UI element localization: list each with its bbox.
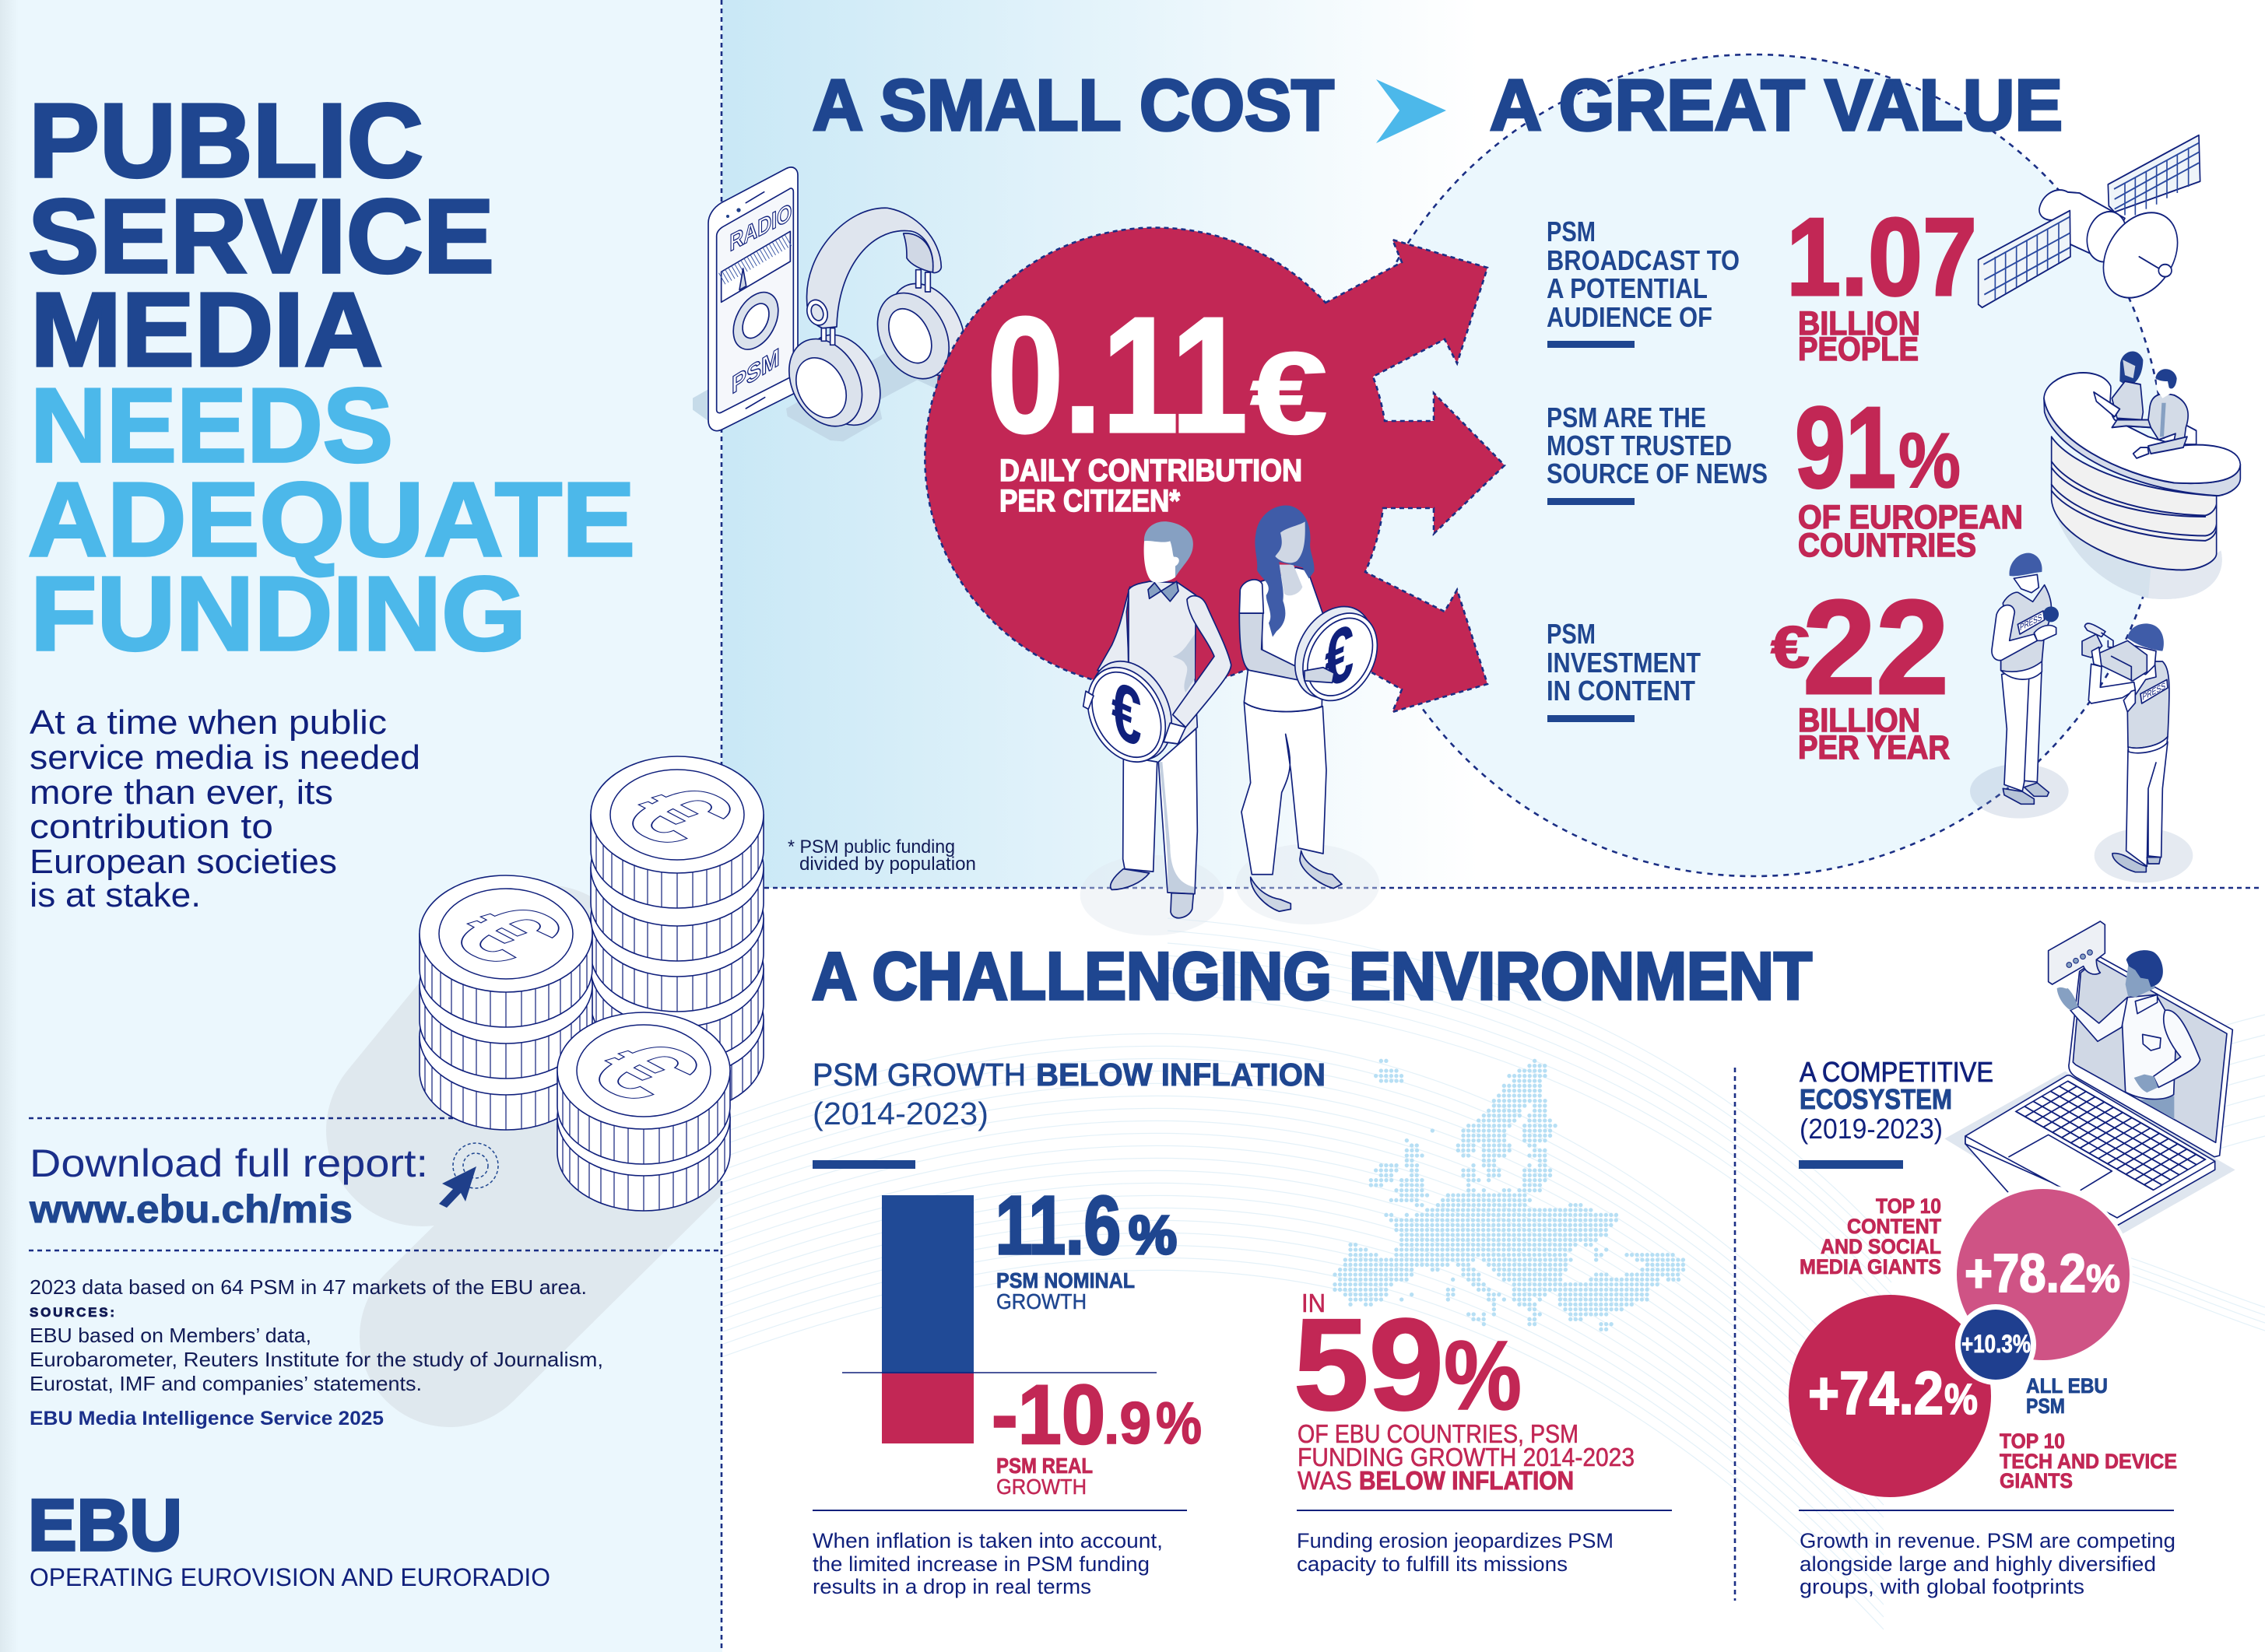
heading: a small cost: A SMALL COST xyxy=(813,65,1334,146)
download call to action: www.ebu.ch/mis xyxy=(29,1187,353,1231)
label: content and social media giants: MEDIA GIANTS xyxy=(1800,1255,1941,1278)
man xyxy=(1072,521,1231,918)
background: top value panel xyxy=(722,0,2265,888)
illustration: reporter and cameraman xyxy=(1970,553,2193,882)
value: real growth: PSM REAL xyxy=(996,1454,1093,1478)
value: nominal growth: PSM NOMINAL xyxy=(996,1268,1135,1292)
coin stack: tall right xyxy=(589,756,766,1113)
description xyxy=(1297,1529,1614,1576)
intro text: At a time when public xyxy=(30,703,387,742)
label: all EBU PSM: PSM xyxy=(2026,1394,2065,1418)
text: below inflation statement: BELOW INFLATION xyxy=(1359,1466,1574,1495)
description xyxy=(1800,1529,2175,1598)
label: trust: SOURCE OF NEWS xyxy=(1547,458,1768,489)
illustration: man and woman holding euro coins xyxy=(1072,505,1392,935)
dotted map of Europe xyxy=(1335,1061,1688,1329)
bar chart xyxy=(842,1195,1157,1443)
label: tech and device giants: GIANTS xyxy=(2000,1469,2073,1492)
circle: +10.3 percent: +10.3% xyxy=(1961,1330,2031,1358)
intro text: service media is needed xyxy=(30,738,420,777)
presenter xyxy=(2049,921,2200,1119)
text: below inflation statement xyxy=(1298,1419,1635,1495)
laptop screen xyxy=(2069,957,2232,1157)
speech bubble xyxy=(2049,921,2105,984)
big dotted circle: great value xyxy=(1343,54,2165,876)
subheading: BELOW INFLATION xyxy=(1036,1057,1326,1093)
circle: +74.2 percent: +74.2 xyxy=(1808,1359,1944,1427)
icon: euro coin stacks xyxy=(418,756,766,1211)
sources xyxy=(30,1275,603,1429)
text: below inflation statement: FUNDING GROWTH 2014-2023 xyxy=(1298,1443,1635,1471)
coin stack: left xyxy=(418,875,595,1130)
value: 22 billion euros per year: € xyxy=(1771,615,1810,681)
stat: audience xyxy=(1547,195,1977,368)
woman xyxy=(1239,505,1392,911)
coin stack: tall right: € xyxy=(589,768,766,861)
circle: +74.2 percent xyxy=(1789,1295,1991,1497)
label: content and social media giants xyxy=(1800,1194,1941,1278)
callout: 0.11 euro: 0.11 xyxy=(987,282,1248,467)
red contribution circle with three arrows xyxy=(925,228,1505,712)
illustration: phone and headphones xyxy=(693,167,980,441)
value: 22 billion euros per year: BILLION xyxy=(1798,702,1920,739)
subheading: ECOSYSTEM xyxy=(1800,1083,1952,1115)
title: SERVICE xyxy=(28,177,494,295)
description: alongside large and highly diversified xyxy=(1800,1552,2156,1576)
coin held by woman: € xyxy=(1325,606,1354,706)
circle: +10.3 percent xyxy=(1955,1304,2036,1385)
illustration: news desk with anchors xyxy=(2044,351,2240,599)
download call to action: Download full report: xyxy=(30,1142,428,1185)
sources: SOURCES: xyxy=(30,1305,114,1320)
label: content and social media giants: CONTENT xyxy=(1847,1215,1941,1238)
coin held by woman xyxy=(1279,591,1392,716)
coin held by man xyxy=(1072,645,1188,777)
coin stack: left: € xyxy=(418,887,595,980)
coin shadow xyxy=(422,980,732,1337)
label: content and social media giants: AND SOCIAL xyxy=(1821,1235,1941,1258)
description: the limited increase in PSM funding xyxy=(813,1552,1150,1576)
intro text: contribution to xyxy=(30,808,273,846)
description: Funding erosion jeopardizes PSM xyxy=(1297,1529,1614,1552)
title: PUBLIC xyxy=(29,82,423,199)
label: trust: MOST TRUSTED xyxy=(1547,430,1732,461)
coin stack: front: € xyxy=(556,1024,732,1117)
label: all EBU PSM xyxy=(2026,1374,2108,1418)
callout: 0.11 euro: PER CITIZEN* xyxy=(999,484,1180,518)
value: 91 percent of European countries xyxy=(1795,384,2023,564)
value: 1.07 billion people: 1.07 xyxy=(1786,195,1977,319)
value: real growth: GROWTH xyxy=(996,1475,1087,1499)
label: content and social media giants: TOP 10 xyxy=(1876,1194,1941,1218)
subheading: (2019-2023) xyxy=(1800,1113,1943,1145)
cameraman xyxy=(2082,623,2169,872)
background: left panel xyxy=(0,0,722,1652)
value: 59 percent xyxy=(1294,1292,1522,1437)
description: capacity to fulfill its missions xyxy=(1297,1552,1568,1576)
title: NEEDS xyxy=(30,367,393,484)
sources: EBU based on Members’ data, xyxy=(30,1324,311,1347)
background: wave lines in bottom section xyxy=(722,918,2265,1629)
subheading: A COMPETITIVE xyxy=(1800,1056,1993,1088)
panel: 59 percent below inflation xyxy=(1294,1289,1672,1576)
cameraman: PRESS xyxy=(2143,679,2165,703)
label: audience: BROADCAST TO xyxy=(1547,244,1740,276)
circle: +78.2 percent: +78.2 xyxy=(1965,1243,2086,1303)
intro text: is at stake. xyxy=(30,876,201,914)
description: When inflation is taken into account, xyxy=(813,1529,1163,1552)
label: tech and device giants: TECH AND DEVICE xyxy=(2000,1450,2177,1473)
phone xyxy=(708,167,798,431)
label: tech and device giants: TOP 10 xyxy=(2000,1429,2065,1453)
label: audience: A POTENTIAL xyxy=(1547,272,1708,304)
callout: 0.11 euro: € xyxy=(1250,328,1328,458)
value: nominal growth: % xyxy=(1129,1205,1177,1265)
value: real growth: -10 xyxy=(992,1367,1105,1461)
reporter xyxy=(1992,553,2059,804)
value: 1.07 billion people: PEOPLE xyxy=(1798,331,1919,368)
label: audience xyxy=(1547,216,1740,348)
title xyxy=(28,82,635,672)
stat: trust xyxy=(1547,384,2023,564)
circle: +78.2 percent: % xyxy=(2086,1257,2120,1300)
label: all EBU PSM: ALL EBU xyxy=(2026,1374,2108,1398)
sources: Eurobarometer, Reuters Institute for the study of Journalism, xyxy=(30,1348,603,1371)
panel: competitive ecosystem xyxy=(1789,1056,2177,1598)
subheading xyxy=(813,1057,1326,1169)
label: trust xyxy=(1547,402,1768,505)
callout: 0.11 euro: DAILY CONTRIBUTION xyxy=(999,454,1302,488)
label: investment: PSM xyxy=(1547,618,1596,650)
phone: PSM xyxy=(732,343,780,400)
heading: a challenging environment: A CHALLENGING ENVIRONMENT xyxy=(812,939,1812,1014)
subheading: (2014-2023) xyxy=(813,1096,989,1131)
label: investment xyxy=(1547,618,1701,722)
title: MEDIA xyxy=(30,271,383,388)
sources: Eurostat, IMF and companies’ statements. xyxy=(30,1372,422,1395)
download call to action xyxy=(29,1142,498,1231)
value: 22 billion euros per year xyxy=(1771,573,1950,766)
phone: RADIO xyxy=(729,198,792,257)
value: nominal growth: 11.6 xyxy=(996,1180,1121,1271)
heading: a great value: A GREAT VALUE xyxy=(1490,65,2063,146)
stat: investment xyxy=(1547,573,1950,766)
label: audience: PSM xyxy=(1547,216,1596,247)
footnote xyxy=(788,837,976,875)
value: 1.07 billion people: BILLION xyxy=(1798,305,1920,342)
value: 22 billion euros per year: 22 xyxy=(1803,573,1949,722)
footnote: * PSM public funding xyxy=(788,837,955,858)
coin held by man: € xyxy=(1111,662,1142,766)
label: investment: INVESTMENT xyxy=(1547,647,1701,679)
coin stack: front xyxy=(556,1012,732,1211)
desk xyxy=(2044,373,2240,570)
sources: 2023 data based on 64 PSM in 47 markets of the EBU area. xyxy=(30,1275,587,1299)
EBU logo text: EBU xyxy=(28,1484,182,1566)
value: 91 percent of European countries: 91 xyxy=(1795,384,1896,512)
value: 91 percent of European countries: COUNTRIES xyxy=(1798,527,1976,564)
text: below inflation statement: WAS xyxy=(1298,1466,1352,1495)
headphones xyxy=(774,208,980,439)
label: audience: AUDIENCE OF xyxy=(1547,301,1712,333)
value: real growth: % xyxy=(1156,1391,1202,1457)
label: tech and device giants xyxy=(2000,1429,2177,1492)
footnote: divided by population xyxy=(799,854,976,875)
value: 1.07 billion people xyxy=(1786,195,1977,368)
value: real growth xyxy=(992,1367,1202,1499)
description xyxy=(813,1529,1163,1598)
value: real growth: .9 xyxy=(1104,1391,1151,1457)
panel: PSM growth below inflation xyxy=(813,1057,1326,1598)
intro text: more than ever, its xyxy=(30,773,333,812)
value: 91 percent of European countries: OF EUROPEAN xyxy=(1798,499,2023,536)
value: nominal growth: GROWTH xyxy=(996,1289,1087,1314)
circle: +74.2 percent: % xyxy=(1944,1374,1978,1423)
value: 22 billion euros per year: PER YEAR xyxy=(1798,729,1950,766)
label: investment: IN CONTENT xyxy=(1547,675,1695,707)
title: ADEQUATE xyxy=(28,461,635,578)
description: groups, with global footprints xyxy=(1800,1575,2084,1598)
subheading xyxy=(1799,1056,1993,1169)
value: 59 percent: 59 xyxy=(1294,1292,1444,1437)
description: Growth in revenue. PSM are competing xyxy=(1800,1529,2175,1552)
illustration: laptop with presenter xyxy=(1944,921,2235,1240)
reporter: PRESS xyxy=(2020,611,2042,633)
value: nominal growth xyxy=(996,1180,1177,1314)
anchors xyxy=(2094,351,2197,454)
EBU logo text: OPERATING EUROVISION AND EURORADIO xyxy=(30,1563,550,1591)
description: results in a drop in real terms xyxy=(813,1575,1091,1598)
icon: cursor xyxy=(439,1143,498,1208)
circle: +78.2 percent xyxy=(1954,1185,2133,1364)
value: 59 percent: % xyxy=(1444,1321,1522,1430)
subheading: PSM GROWTH xyxy=(813,1057,1026,1093)
intro text xyxy=(30,703,420,914)
icon: chevron arrow xyxy=(1376,79,1446,143)
title: FUNDING xyxy=(30,555,526,672)
label: trust: PSM ARE THE xyxy=(1547,402,1706,433)
intro text: European societies xyxy=(30,843,337,881)
EBU logo text xyxy=(28,1484,550,1591)
panel: 59 percent below inflation: IN xyxy=(1301,1289,1326,1317)
text: below inflation statement: OF EBU COUNTRIES, PSM xyxy=(1298,1419,1578,1448)
illustration: satellite xyxy=(1979,135,2200,315)
value: 91 percent of European countries: % xyxy=(1898,417,1961,504)
sources: EBU Media Intelligence Service 2025 xyxy=(30,1408,384,1429)
laptop base and keyboard xyxy=(1965,1075,2215,1226)
